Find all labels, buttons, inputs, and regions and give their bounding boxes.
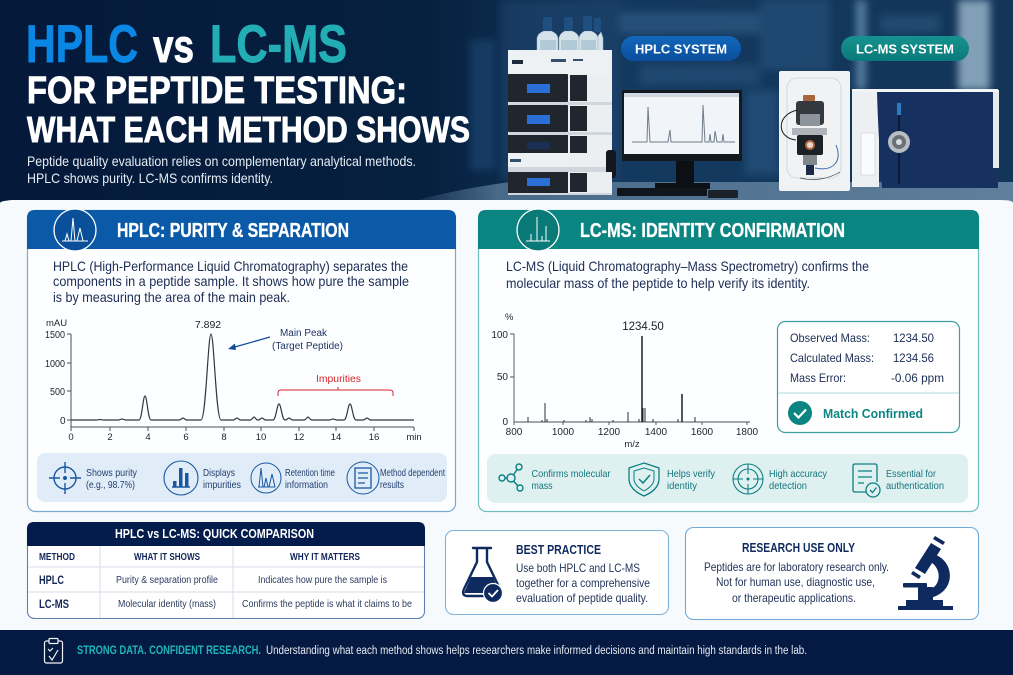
chromatogram chart: mAU [46,318,67,329]
text: essential for authentication [886,468,944,492]
text: displays impurities: Displays [203,467,235,479]
text: retention time: Retention time [285,467,335,479]
chromatogram chart: 10 [256,432,266,443]
comparison table: Molecular identity (mass) [118,598,216,610]
text: displays impurities [203,467,241,491]
title [26,15,470,150]
mass results card [778,322,960,432]
panel header: HPLC [27,210,456,249]
mass spectrum chart [491,312,759,450]
subtitle [27,153,416,186]
title: FOR PEPTIDE TESTING: [27,70,407,112]
text: helps verify identity: Helps verify [667,468,716,480]
callout: research use only: RESEARCH USE ONLY [742,541,856,555]
comparison table: HPLC [39,573,64,587]
text: method dependent: results [380,479,404,491]
text: displays impurities: impurities [203,479,241,491]
text: retention time [285,467,335,491]
mass spectrum chart: 0 [502,417,508,428]
chromatogram chart: 8 [221,432,227,443]
mass spectrum chart: 1800 [736,427,759,438]
mass spectrum chart: 800 [506,427,523,438]
chromatogram chart: 1500 [45,330,65,341]
panel header: LC-MS [478,210,979,249]
chromatogram chart: 1000 [45,359,65,370]
title: WHAT EACH METHOD SHOWS [27,109,470,150]
mass spectrum chart: 1400 [645,427,668,438]
feature strip: LC-MS [487,454,968,503]
icon: clipboard [44,638,62,663]
text: high accuracy detection [769,468,828,492]
text: essential for authentication: authentication [886,480,944,492]
callout: best practice: BEST PRACTICE [516,543,601,557]
LC-MS description: LC-MS (Liquid Chromatography–Mass Spectrometry) confirms the [506,258,869,274]
icon: chromatogram badge [54,209,96,251]
text: shows purity: Shows purity [86,467,138,479]
text: method dependent: Method dependent [380,467,445,479]
label: LC-MS system [841,36,969,61]
callout: best practice: together for a comprehensive [516,576,650,590]
mass spectrum chart: % [505,312,514,323]
comparison table: WHAT IT SHOWS [134,552,200,563]
text: shows purity [86,467,138,491]
comparison table: METHOD [39,552,75,563]
chromatogram chart: 0 [60,416,66,427]
chromatogram chart: 12 [294,432,304,443]
comparison table: Purity & separation profile [116,574,218,586]
callout: impurities: Impurities [316,373,361,385]
icon: check mark [788,401,812,425]
text: high accuracy detection: High accuracy [769,468,828,480]
chromatogram chart: 7.892 [195,319,221,331]
callout: main peak: Main Peak [280,328,328,339]
label: LC-MS system: LC-MS SYSTEM [856,42,954,56]
HPLC description: HPLC (High-Performance Liquid Chromatography) separates the [53,258,408,274]
text: confirms molecular mass: mass [532,480,552,492]
HPLC description: is by measuring the area of the main peak. [53,289,290,305]
label: HPLC system [621,36,741,61]
chromatogram chart: 14 [331,432,341,443]
HPLC description: components in a peptide sample. It shows how pure the sample [53,273,409,289]
chromatogram chart: 16 [369,432,379,443]
mass results card: 1234.56 [893,351,934,365]
chromatogram chart: 500 [50,387,65,398]
callout: research use only: Peptides are for laboratory research only. [704,560,889,574]
callout: impurities [278,373,393,396]
mass results card: -0.06 ppm [891,371,944,385]
title: HPLC [26,15,138,74]
HPLC description [53,258,409,305]
chromatogram chart: 4 [145,432,151,443]
callout: research use only [686,528,978,620]
icon: accuracy target [733,464,763,494]
comparison table [27,522,425,618]
subtitle: HPLC shows purity. LC-MS confirms identity. [27,170,273,186]
HPLC instrument stack [508,16,616,195]
text: helps verify identity [667,468,716,492]
text: shows purity: (e.g., 98.7%) [86,479,135,491]
chromatogram chart: 6 [183,432,189,443]
mass spectrum chart: m/z [624,439,640,450]
footer bar [0,630,1013,675]
callout: main peak [228,328,343,352]
mass spectrum chart: 1200 [598,427,621,438]
callout: best practice [446,530,668,614]
comparison table: WHY IT MATTERS [290,552,360,563]
main content background [0,200,1013,631]
callout: research use only: Not for human use, diagnostic use, [716,575,875,589]
text: retention time: information [285,479,328,491]
mass spectrum chart: 1234.50 [622,321,664,333]
text: high accuracy detection: detection [769,480,807,492]
title: vs [153,20,194,72]
mass results card: Observed Mass: [790,331,870,345]
mass results card: Mass Error: [790,371,846,385]
callout: best practice: Use both HPLC and LC-MS [516,561,640,575]
comparison table: Confirms the peptide is what it claims to be [242,598,412,610]
footer bar: Understanding what each method shows helps researchers make informed decisions and maintain high standards in the lab. [266,645,807,657]
callout: research use only: or therapeutic applications. [732,591,856,605]
text: method dependent [380,467,445,491]
icon: crosshair [49,462,81,494]
label: HPLC system: HPLC SYSTEM [635,42,727,56]
icon: microscope [898,536,953,610]
icon: shield [629,463,659,496]
mass results card: Match Confirmed [823,406,923,421]
icon: retention peaks [251,463,281,493]
text: essential for authentication: Essential for [886,468,936,480]
chromatogram chart: 0 [68,432,74,443]
callout: main peak: (Target Peptide) [272,341,343,352]
chromatogram chart [45,318,422,443]
icon: method document [347,462,379,494]
panel: LC-MS identity confirmation [478,209,979,512]
mass spectrum chart: 100 [491,330,508,341]
icon: authenticated document [853,464,880,497]
callout: best practice: evaluation of peptide quality. [516,591,648,605]
subtitle: Peptide quality evaluation relies on complementary analytical methods. [27,153,416,169]
mass results card: Calculated Mass: [790,351,874,365]
chromatogram chart: 2 [107,432,113,443]
LC-MS description [506,258,869,291]
comparison table: HPLC vs LC-MS: QUICK COMPARISON [115,527,314,541]
icon: spectrum badge [517,209,559,251]
chromatogram chart: min [406,432,422,443]
panel header: HPLC: HPLC: PURITY & SEPARATION [117,220,349,242]
feature strip: HPLC [37,453,447,502]
panel: HPLC purity and separation [27,209,456,512]
LC-MS description: molecular mass of the peptide to help verify its identity. [506,275,810,291]
comparison table: Indicates how pure the sample is [258,574,387,586]
footer bar: STRONG DATA. CONFIDENT RESEARCH. [77,645,261,657]
mass spectrum chart: 50 [497,372,508,383]
icon: molecule [499,464,523,491]
header banner [0,0,1013,210]
mass results card: 1234.50 [893,331,934,345]
panel header: LC-MS: LC-MS: IDENTITY CONFIRMATION [580,220,845,242]
text: confirms molecular mass: Confirms molecular [532,468,611,480]
text: confirms molecular mass [532,468,611,492]
comparison table: LC-MS [39,597,69,611]
text: helps verify identity: identity [667,480,698,492]
title: LC-MS [210,15,347,74]
icon: flask with check [463,548,502,602]
LC-MS instrument [779,71,999,191]
mass spectrum chart: 1600 [691,427,714,438]
icon: bar chart [164,461,198,495]
HPLC monitor [617,90,742,198]
mass spectrum chart: 1000 [552,427,575,438]
